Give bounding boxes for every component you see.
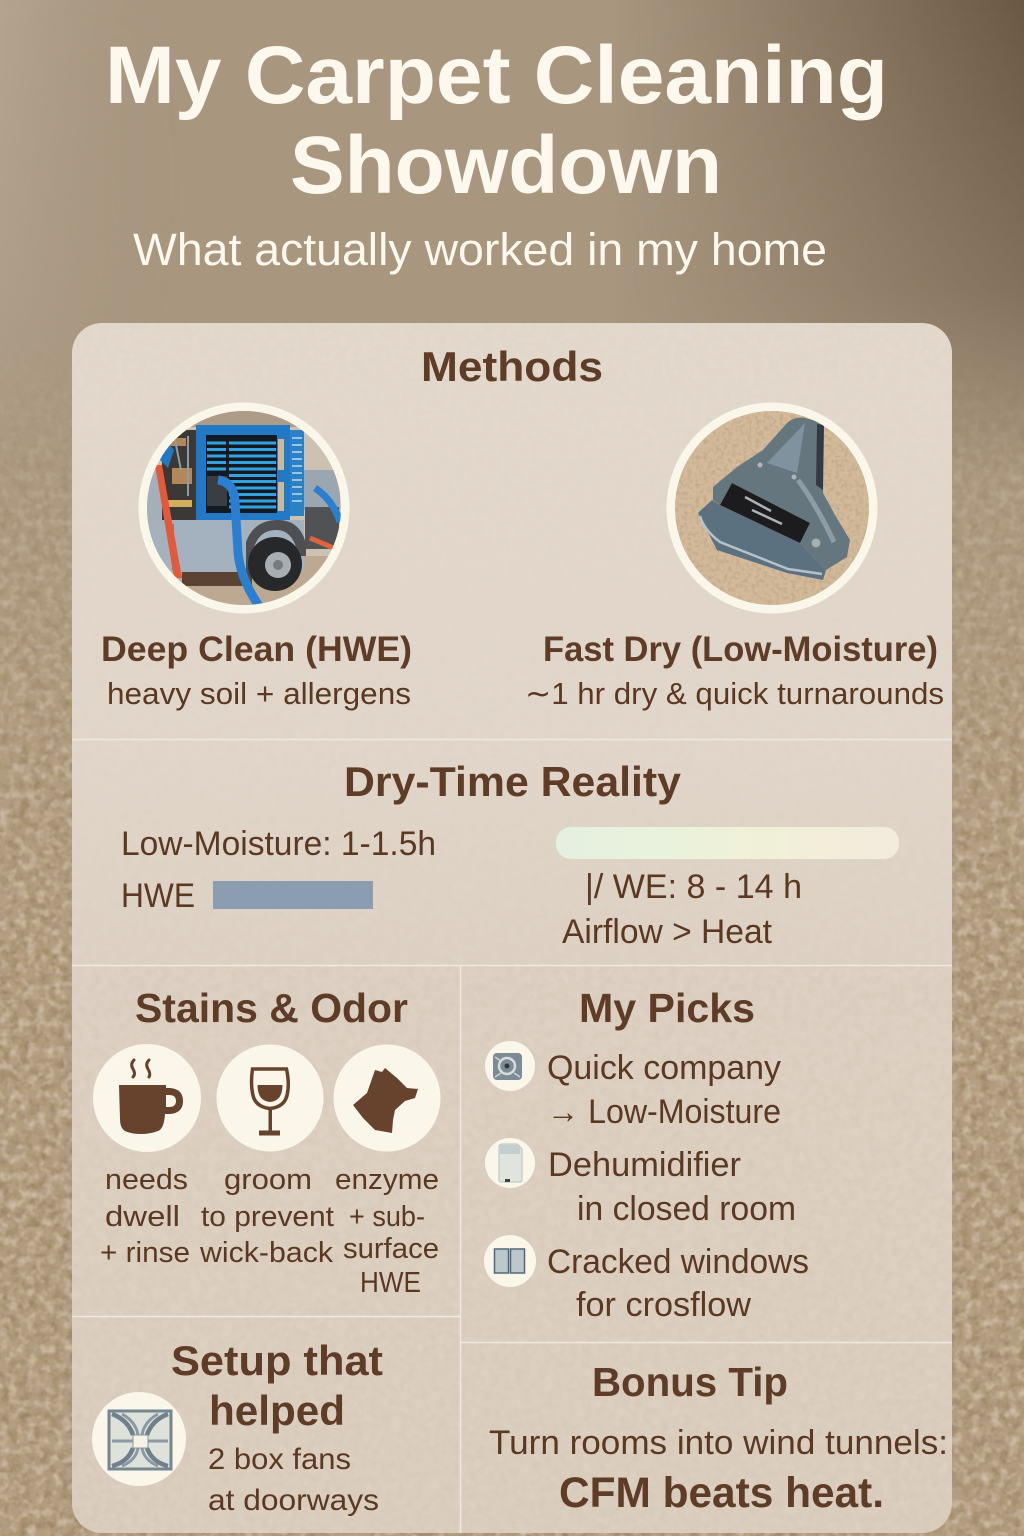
method: fast dry — [525, 630, 944, 711]
icon: wine glass — [216, 1044, 324, 1152]
text: wine tip: wick-back — [199, 1237, 334, 1269]
panel: setup that helped — [92, 1337, 383, 1517]
text: box fans: 2 box fans — [208, 1443, 351, 1476]
text: coffee tip: needs — [105, 1164, 188, 1196]
panel: dry-time reality — [121, 758, 899, 951]
text: wind tunnels: Turn rooms into wind tunnels: — [489, 1424, 948, 1462]
method: fast dry: ∼1 hr dry & quick turnarounds — [525, 676, 944, 711]
icon: dog — [334, 1044, 440, 1152]
pick: cracked windows: for crosflow — [576, 1286, 751, 1324]
image: hot water extraction truck unit — [138, 402, 350, 616]
text: box fans: at doorways — [208, 1484, 379, 1517]
title: Showdown — [290, 120, 722, 211]
text: wine tip — [199, 1164, 334, 1269]
heading: setup that helped — [171, 1337, 383, 1434]
note: airflow over heat: Airflow > Heat — [562, 913, 773, 951]
heading: dry-time reality: Dry-Time Reality — [344, 758, 682, 805]
heading: methods: Methods — [421, 343, 603, 390]
pick: quick company: → Low-Moisture — [547, 1093, 781, 1131]
text: pet tip: enzyme — [335, 1164, 439, 1196]
label: low-moisture time: Low-Moisture: 1-1.5h — [121, 825, 436, 863]
icon: windows — [484, 1235, 536, 1287]
pick: dehumidifier: Dehumidifier — [548, 1146, 741, 1184]
icon: coffee cup — [93, 1044, 201, 1152]
bar: low-moisture — [556, 827, 899, 859]
method: deep clean — [101, 630, 412, 711]
text: coffee tip — [100, 1164, 190, 1269]
text: pet tip — [335, 1164, 439, 1299]
label: hwe time: |/ WE: 8 - 14 h — [585, 868, 802, 906]
method: deep clean: Deep Clean (HWE) — [101, 630, 412, 669]
panel: my picks — [484, 985, 809, 1324]
title — [105, 30, 888, 211]
text: wine tip: groom — [224, 1164, 312, 1196]
panel: bonus tip — [489, 1359, 948, 1517]
subtitle: What actually worked in my home — [133, 224, 827, 275]
method: fast dry: Fast Dry (Low-Moisture) — [543, 630, 938, 669]
heading: setup that helped: helped — [209, 1387, 345, 1434]
icon: company machine — [485, 1041, 535, 1091]
icon: dehumidifier — [485, 1138, 535, 1188]
heading: setup that helped: Setup that — [171, 1337, 383, 1384]
pick: quick company — [547, 1049, 781, 1131]
text: pet tip: surface — [343, 1233, 439, 1265]
text: box fans — [208, 1443, 379, 1517]
pick: dehumidifier — [548, 1146, 796, 1228]
pick: dehumidifier: in closed room — [577, 1190, 796, 1228]
text: cfm beats heat: CFM beats heat. — [559, 1469, 884, 1517]
text: pet tip: + sub- — [349, 1201, 425, 1233]
panel: stains and odor — [93, 985, 440, 1299]
pick: cracked windows — [547, 1243, 809, 1324]
image: low-moisture cleaning tool on carpet — [666, 402, 878, 614]
title: My Carpet Cleaning — [105, 30, 888, 121]
panel: methods — [101, 343, 944, 711]
heading: bonus tip: Bonus Tip — [592, 1359, 788, 1405]
pick: cracked windows: Cracked windows — [547, 1243, 809, 1281]
icon: box fan — [92, 1392, 186, 1486]
heading: stains and odor: Stains & Odor — [135, 985, 408, 1031]
heading: my picks: My Picks — [579, 985, 755, 1031]
bar: hwe — [213, 881, 373, 909]
method: deep clean: heavy soil + allergens — [107, 676, 411, 711]
pick: quick company: Quick company — [547, 1049, 781, 1087]
text: coffee tip: dwell — [105, 1201, 180, 1233]
text: coffee tip: + rinse — [100, 1237, 190, 1269]
panel: main card — [72, 323, 952, 1533]
text: wine tip: to prevent — [201, 1201, 334, 1233]
text: pet tip: HWE — [360, 1267, 421, 1299]
label: hwe: HWE — [121, 877, 195, 915]
